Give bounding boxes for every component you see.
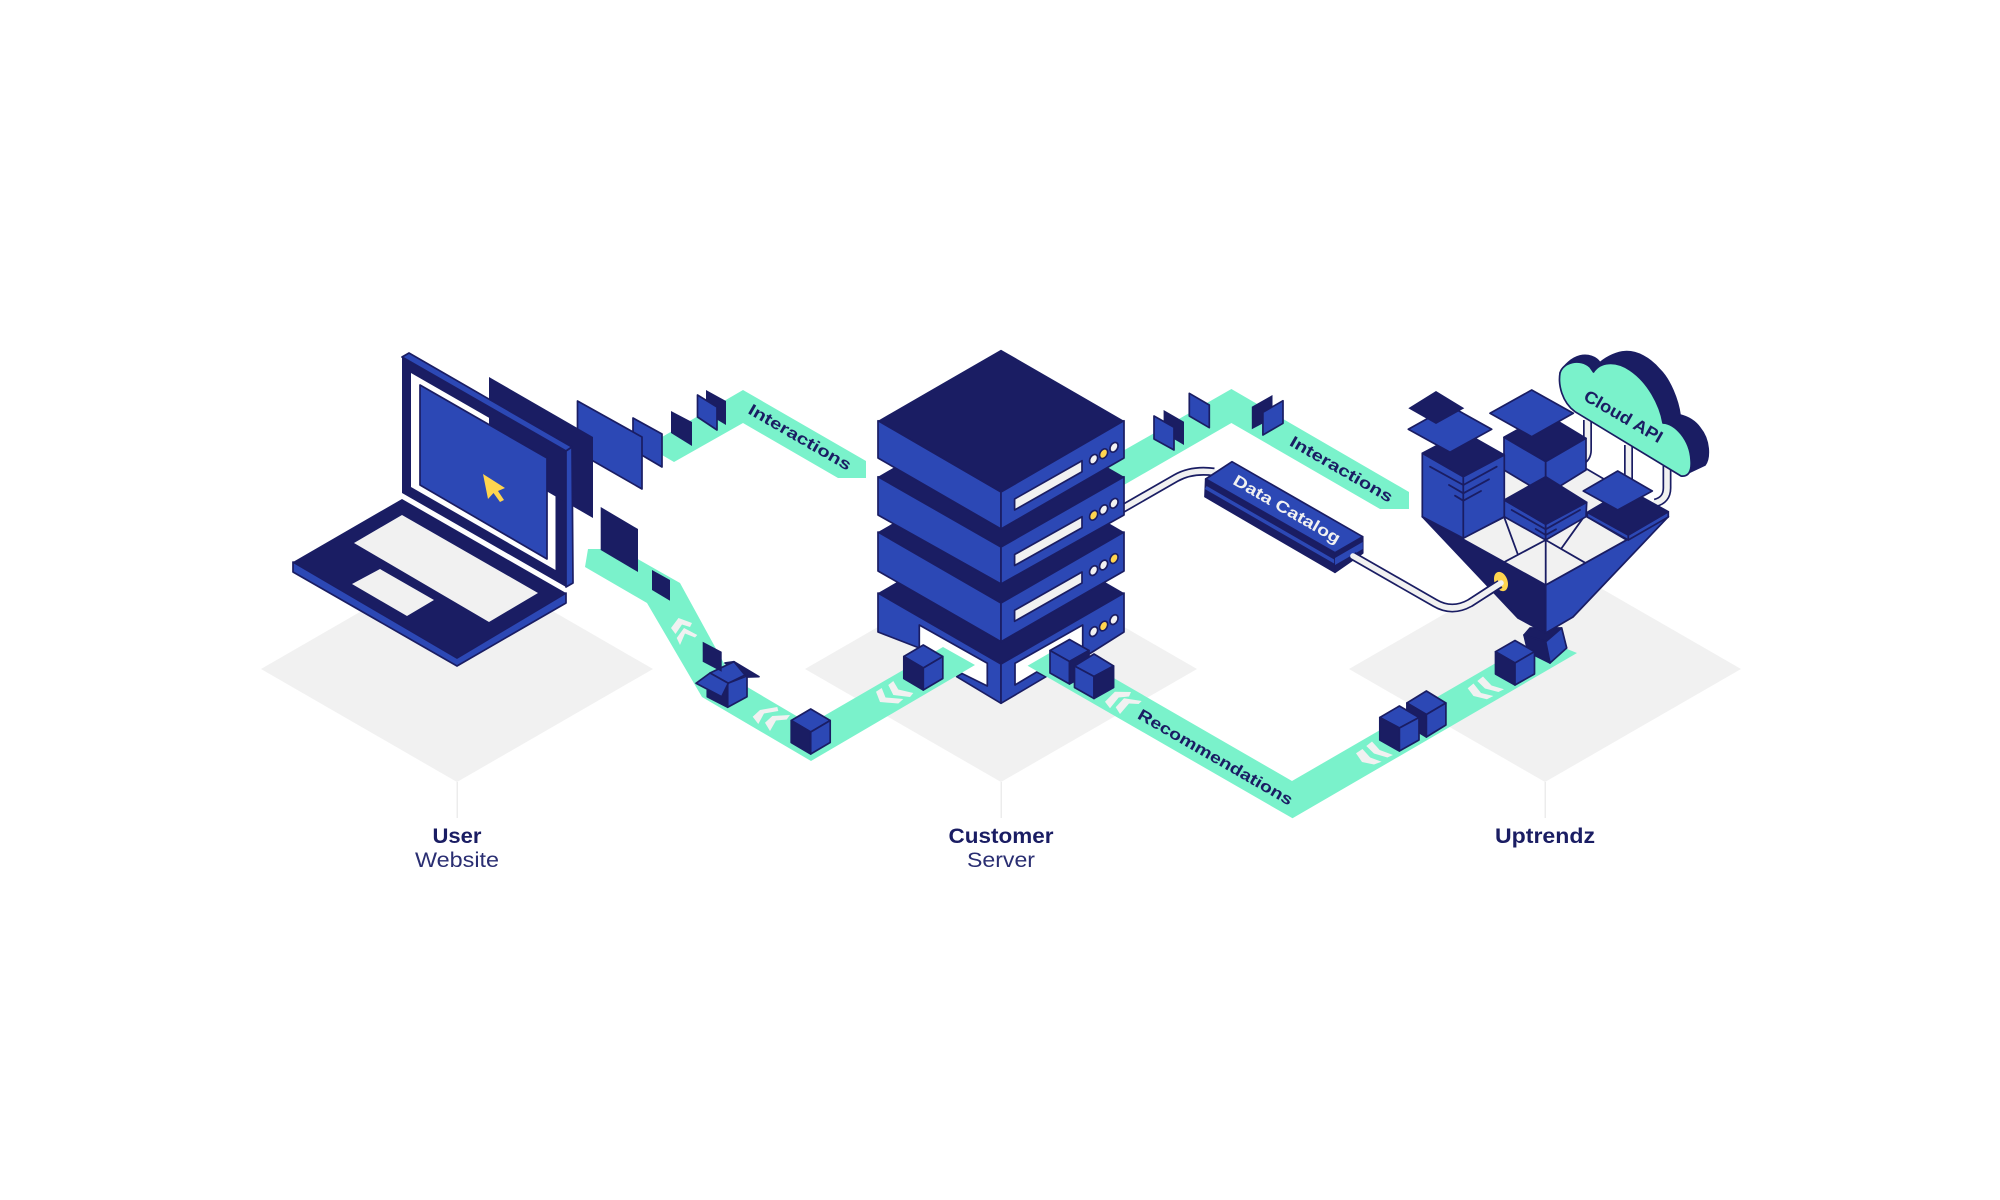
floating data pages on delivery band — [601, 507, 670, 601]
cube on delivery band, lower — [791, 709, 830, 754]
server unit 4 — [878, 522, 1124, 703]
delivery band: server to user — [585, 549, 975, 761]
data catalog module — [1205, 462, 1363, 572]
interactions band: user to customer: Interactions — [745, 402, 854, 474]
cube pair at server on recommendations band — [1050, 640, 1114, 698]
cube on delivery band, at server — [904, 645, 943, 690]
icon: funnel inlet ring — [1470, 570, 1511, 603]
recommendations band: uptrendz to server — [1028, 638, 1577, 818]
floating navy screen behind lid — [489, 377, 593, 518]
ground platform: user — [261, 556, 653, 818]
cable: server to data catalog — [1122, 471, 1214, 509]
label: Customer Server — [948, 825, 1054, 872]
label: Uptrendz: Uptrendz — [1495, 825, 1595, 848]
ground platform: uptrendz — [1349, 556, 1741, 818]
label: User Website — [415, 825, 499, 872]
laptop lid — [402, 357, 566, 587]
icon: open box — [696, 642, 759, 707]
data packets on left interactions band — [578, 390, 726, 489]
interactions band: user to customer — [662, 390, 866, 478]
cable: data catalog to funnel — [1353, 556, 1502, 608]
server unit 1 — [878, 350, 1124, 529]
interactions band: customer to uptrendz: Interactions — [1287, 434, 1396, 506]
cloud api — [1560, 352, 1708, 476]
label: User Website: Website — [415, 849, 499, 872]
laptop — [293, 353, 593, 666]
center low data block — [1504, 477, 1587, 540]
funnel spout — [1524, 628, 1567, 663]
label: Customer Server: Server — [967, 849, 1035, 872]
server stack — [878, 350, 1124, 703]
back data tower — [1490, 390, 1586, 495]
interactions band: customer to uptrendz — [1100, 389, 1409, 509]
cloud connector tubes — [1580, 420, 1667, 503]
data catalog module: Data Catalog — [1230, 472, 1343, 548]
laptop base — [293, 499, 566, 666]
cube below funnel — [1496, 640, 1534, 685]
left data tower — [1408, 391, 1504, 538]
label: User Website: User — [432, 825, 482, 848]
cloud api: Cloud API — [1580, 386, 1666, 447]
laptop screen — [420, 385, 547, 559]
ground platform: customer — [805, 556, 1197, 818]
recommendations band: uptrendz to server: Recommendations — [1135, 707, 1296, 809]
funnel — [1422, 445, 1668, 633]
icon: cursor — [483, 474, 505, 502]
server unit 2 — [878, 406, 1124, 584]
server unit 3 — [878, 461, 1124, 642]
label: Customer Server: Customer — [948, 825, 1054, 848]
right low data block — [1583, 471, 1668, 540]
laptop lid edge — [402, 353, 573, 587]
data packets on right interactions band — [1154, 393, 1283, 450]
cube pair on recommendations band — [1380, 691, 1446, 751]
